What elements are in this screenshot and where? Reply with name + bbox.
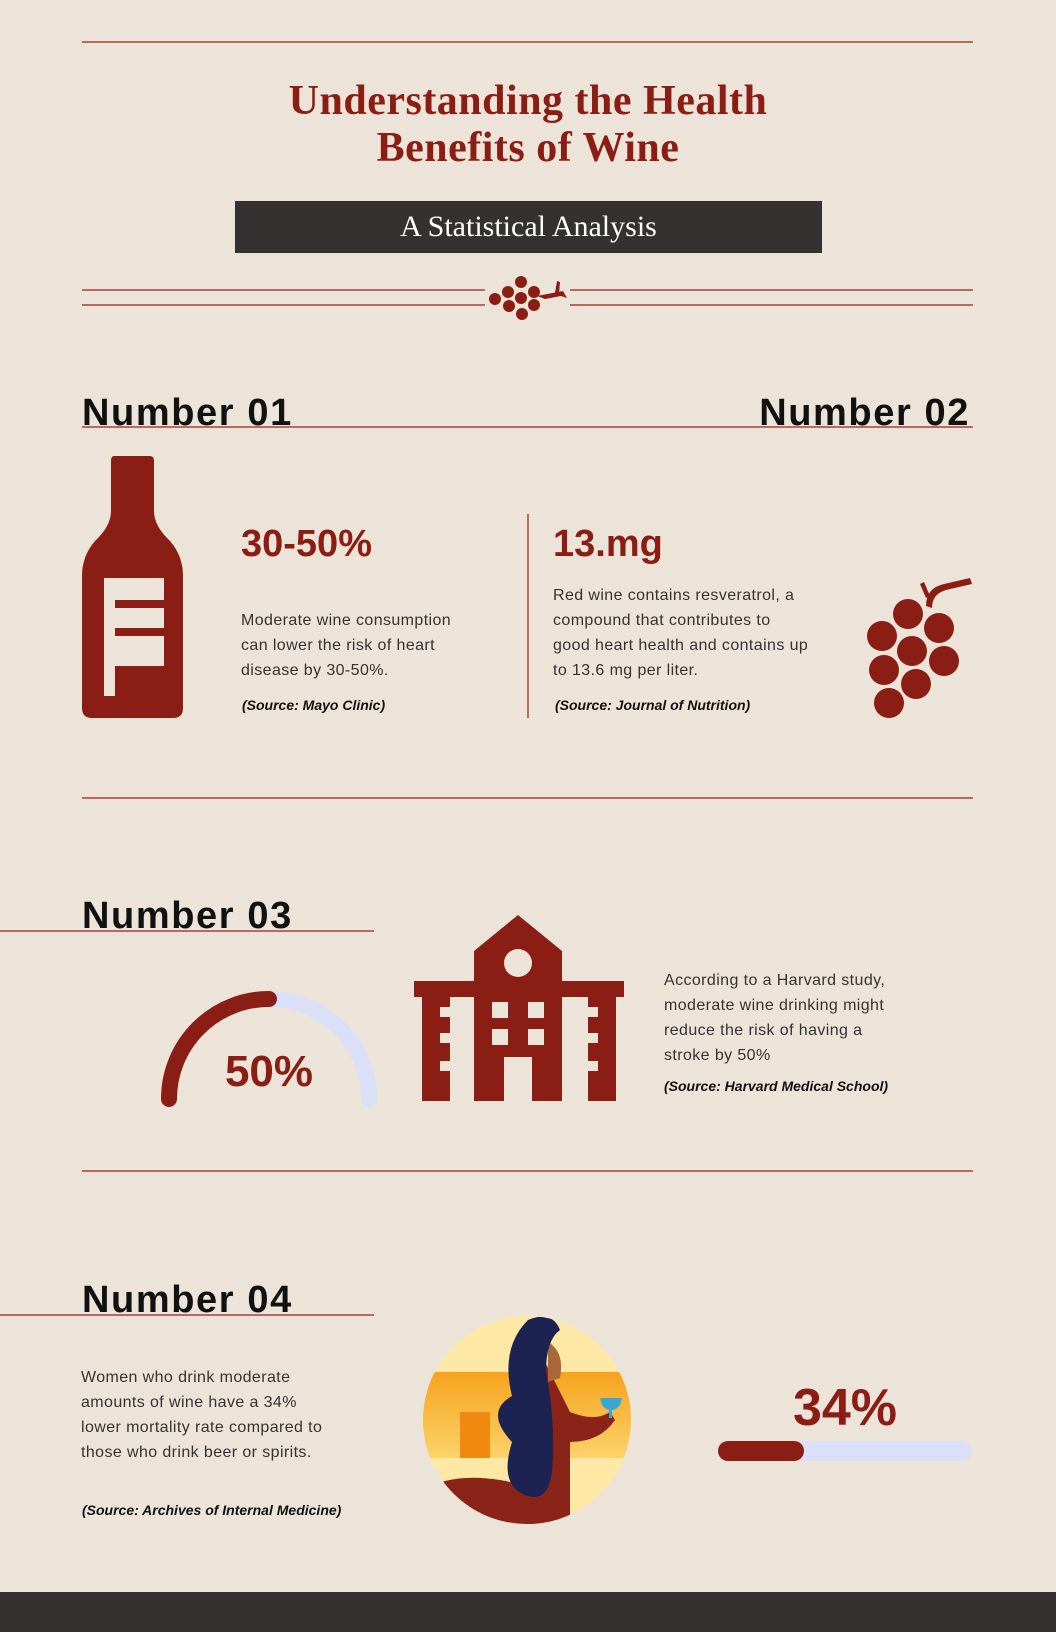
- icon: grapes: [867, 578, 972, 718]
- subtitle banner: [235, 201, 822, 253]
- icon: hospital building: [414, 915, 624, 1101]
- subtitle banner: A Statistical Analysis: [400, 210, 657, 243]
- source: Archives of Internal Medicine: (Source: Archives of Internal Medicine): [82, 1502, 341, 1518]
- icon: grape cluster divider: [485, 276, 570, 320]
- stat: 30-50%: 30-50%: [241, 523, 372, 565]
- source: Mayo Clinic: (Source: Mayo Clinic): [242, 697, 385, 713]
- title: Understanding the Health: [289, 78, 767, 124]
- stat: 34%: 34%: [793, 1379, 897, 1437]
- heading: Number 02: Number 02: [759, 392, 970, 434]
- title: Benefits of Wine: [377, 125, 679, 171]
- icon: wine bottle: [82, 456, 183, 718]
- heading: Number 03: Number 03: [82, 895, 293, 937]
- text: women mortality: Women who drink moderate amounts of wine have a 34% lower mortality rate compared to those who drink beer or spirits.: [81, 1369, 322, 1461]
- heading: Number 04: Number 04: [82, 1279, 293, 1321]
- text: heart disease: Moderate wine consumption can lower the risk of heart disease by 30-50%.: [241, 612, 451, 679]
- chart: 50% gauge: 50%: [225, 1047, 313, 1096]
- text: Harvard study: According to a Harvard study, moderate wine drinking might reduce the risk of having a stroke by 50%: [664, 972, 885, 1064]
- stat: 13.mg: 13.mg: [553, 523, 663, 565]
- chart: 50% gauge: [161, 991, 377, 1107]
- footer: [0, 1592, 1056, 1632]
- text: resveratrol: Red wine contains resveratrol, a compound that contributes to good heart health and contains up to 13.6 mg per liter.: [553, 587, 808, 679]
- illustration: woman with wine glass: [423, 1316, 631, 1524]
- chart: 34% progress bar: [718, 1441, 972, 1461]
- heading: Number 01: Number 01: [82, 392, 293, 434]
- source: Journal of Nutrition: (Source: Journal of Nutrition): [555, 697, 750, 713]
- title: [289, 78, 767, 171]
- source: Harvard Medical School: (Source: Harvard Medical School): [664, 1078, 888, 1094]
